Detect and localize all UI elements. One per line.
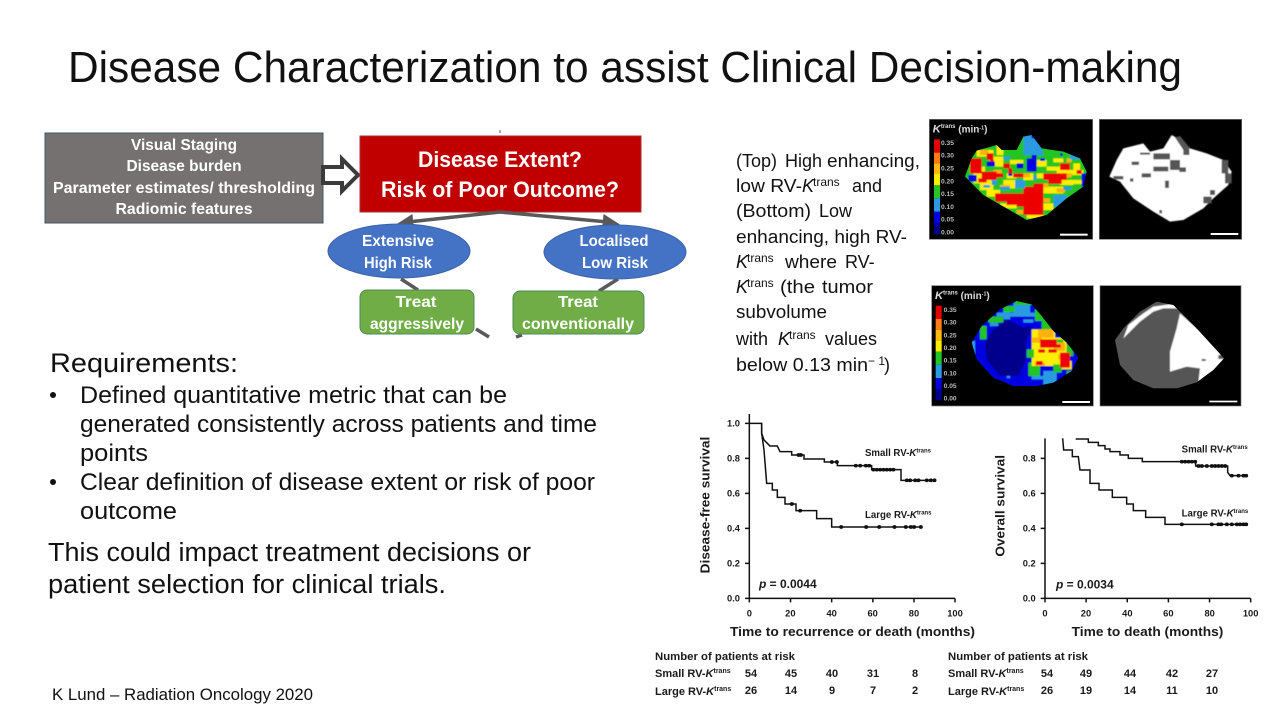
table: patients at risk, overall survival: trans: [1007, 686, 1024, 693]
scale bar: [1209, 401, 1237, 402]
x axis ticks: 0: [1042, 609, 1048, 619]
colour scale: 0.00: [941, 229, 954, 236]
curve: large RV-Ktrans: Large RV-K: [1182, 509, 1234, 520]
table: patients at risk, disease-free survival: 8: [912, 668, 918, 680]
y axis ticks: 0.6: [727, 489, 740, 499]
table: patients at risk, disease-free survival: 40: [826, 668, 838, 680]
mask shape: [1109, 135, 1232, 222]
table: patients at risk, overall survival: 26: [1041, 685, 1053, 697]
heatmap: low enhancing tumour: [932, 286, 1093, 406]
connector stubs below treatment boxes: [476, 329, 522, 337]
table: patients at risk, disease-free survival: 9: [829, 685, 835, 697]
node: extensive high risk: [328, 224, 470, 278]
panel: disease extent question: Risk of Poor Outcome?: [381, 177, 619, 202]
top tick: [499, 130, 501, 133]
curve: large RV-Ktrans: trans: [917, 510, 932, 516]
panel: imaging inputs: Visual Staging: [131, 137, 237, 154]
table: patients at risk, overall survival: [948, 651, 1218, 698]
table: patients at risk, overall survival: 11: [1166, 685, 1178, 697]
table: patients at risk, disease-free survival: trans: [714, 686, 731, 693]
y axis ticks: [727, 419, 741, 604]
caption text: subvolume: [736, 302, 827, 322]
node: treat conventionally: conventionally: [522, 316, 634, 333]
caption text: K: [802, 176, 815, 196]
x axis ticks: 20: [1081, 609, 1091, 619]
caption text: low RV-: [736, 176, 802, 196]
tumour map: [965, 135, 1087, 220]
x axis title: Time to recurrence or death (months): [730, 624, 975, 639]
table: patients at risk, overall survival: 19: [1080, 685, 1092, 697]
table: patients at risk, overall survival: 44: [1124, 668, 1137, 680]
caption text: K: [736, 277, 749, 297]
caption text: (the: [780, 277, 815, 297]
node: localised low risk: Low Risk: [582, 255, 648, 272]
x axis ticks: 100: [947, 609, 963, 619]
caption text: K: [736, 252, 749, 272]
x axis ticks: 40: [1122, 609, 1133, 619]
table: patients at risk, overall survival: 49: [1080, 668, 1092, 680]
y axis ticks: 0.4: [1023, 524, 1036, 534]
axes: [745, 414, 955, 602]
x axis ticks: 40: [826, 609, 837, 619]
caption text: High: [785, 151, 822, 171]
heatmap: low enhancing tumour: trans: [943, 290, 958, 296]
heatmap: low enhancing tumour: -1: [982, 292, 986, 298]
colour scale: 0.15: [941, 191, 954, 198]
colour scale: 0.30: [941, 153, 954, 160]
y axis ticks: 0.6: [1023, 489, 1036, 499]
mask shape: [1115, 302, 1224, 388]
heatmap: high enhancing tumour: (min: [955, 125, 979, 136]
curve: large RV-Ktrans: trans: [1234, 509, 1249, 515]
colour scale: 0.15: [944, 358, 957, 365]
threshold mask: low enhancing tumour: [1100, 286, 1241, 406]
table: patients at risk, disease-free survival: 2: [912, 685, 918, 697]
node: extensive high risk: High Risk: [364, 255, 432, 272]
x axis ticks: 60: [1163, 609, 1174, 619]
colour scale: [936, 306, 957, 403]
caption text: trans: [747, 251, 774, 265]
y axis ticks: 0.2: [1023, 559, 1036, 569]
curve: small RV-Ktrans: [749, 423, 935, 480]
heatmap: high enhancing tumour: -1: [979, 125, 984, 131]
caption text: enhancing,: [827, 151, 920, 171]
colour scale: 0.35: [941, 140, 954, 147]
panel: disease extent question: Disease Extent?: [418, 147, 582, 172]
y axis title: Overall survival: [993, 455, 1007, 557]
table: patients at risk, disease-free survival: 45: [785, 668, 797, 680]
citation: K Lund – Radiation Oncology 2020: [52, 686, 313, 704]
text block: requirements: points: [80, 440, 148, 467]
text block: requirements: Requirements:: [50, 348, 238, 378]
x axis ticks: 80: [1204, 609, 1215, 619]
node: treat aggressively: aggressively: [370, 316, 464, 333]
heatmap: high enhancing tumour: K: [933, 124, 942, 136]
table: patients at risk, disease-free survival: 26: [745, 685, 757, 697]
x axis ticks: 20: [785, 609, 796, 619]
heatmap: low enhancing tumour: (min: [958, 291, 982, 302]
caption text: Low: [819, 201, 853, 221]
node: localised low risk: Localised: [580, 233, 648, 250]
panel: imaging inputs: Radiomic features: [116, 201, 253, 218]
table: patients at risk, overall survival: Small RV-K: [948, 668, 1006, 680]
caption text: RV-: [845, 252, 875, 272]
y axis ticks: 0.8: [1023, 454, 1036, 464]
table: patients at risk, overall survival: 54: [1041, 668, 1054, 680]
colour scale: 0.20: [944, 345, 957, 352]
colour scale: 0.20: [941, 178, 954, 185]
table: patients at risk, overall survival: 42: [1166, 668, 1178, 680]
table: patients at risk, disease-free survival: 31: [867, 668, 879, 680]
tumour map: [972, 301, 1078, 386]
y axis ticks: 1.0: [727, 419, 740, 429]
x axis ticks: 0: [747, 609, 752, 619]
table: patients at risk, overall survival: 27: [1206, 668, 1218, 680]
heatmap: high enhancing tumour: [929, 119, 1093, 239]
table: patients at risk, overall survival: Number of patients at risk: [948, 651, 1089, 663]
chart: overall survival: [993, 438, 1258, 639]
caption text: where: [784, 252, 837, 272]
caption text: − 1: [868, 354, 885, 368]
scale bar: [1060, 234, 1088, 236]
connector: extensive to treat: [401, 279, 418, 290]
connector: localised to treat: [599, 279, 618, 291]
title: Disease Characterization to assist Clinical Decision-making: [68, 43, 1182, 92]
y axis ticks: 0.4: [727, 524, 741, 534]
panel: imaging inputs: Disease burden: [126, 158, 242, 175]
panel: imaging inputs: Parameter estimates/ thresholding: [53, 180, 315, 197]
curve: small RV-Ktrans: [1076, 439, 1248, 476]
curve: large RV-Ktrans: [762, 423, 932, 527]
caption text: trans: [747, 276, 774, 290]
panel: imaging inputs: [45, 133, 323, 223]
text block: impact statement: This could impact treatment decisions or: [48, 539, 532, 567]
node: treat aggressively: [360, 290, 474, 334]
curve: large RV-Ktrans: [1063, 438, 1249, 524]
table: patients at risk, disease-free survival: [655, 651, 918, 698]
axes: [1041, 438, 1251, 602]
panel: disease extent question: [360, 136, 641, 212]
curve: small RV-Ktrans: Small RV-K: [1182, 445, 1233, 456]
p value: p = 0.0034: [1055, 578, 1114, 592]
caption text: trans: [789, 328, 816, 342]
colour scale: 0.25: [944, 332, 957, 339]
caption text: K: [778, 329, 791, 349]
text block: requirements: generated consistently across patients and time: [80, 411, 597, 438]
colour scale: 0.25: [941, 166, 954, 173]
caption text: enhancing, high RV-: [736, 227, 907, 247]
y axis ticks: 0.0: [1023, 594, 1036, 604]
table: patients at risk, disease-free survival: 7: [870, 685, 876, 697]
caption text: tumor: [822, 277, 873, 297]
colour scale: 0.05: [944, 383, 957, 390]
colour scale: [934, 139, 954, 236]
table: patients at risk, disease-free survival: Large RV-K: [655, 686, 714, 698]
x axis ticks: [747, 609, 963, 619]
text block: impact statement: patient selection for clinical trials.: [48, 571, 446, 599]
colour scale: 0.05: [941, 217, 954, 224]
table: patients at risk, overall survival: trans: [1006, 668, 1024, 675]
colour scale: 0.35: [944, 307, 957, 314]
x axis ticks: 60: [867, 609, 878, 619]
y axis ticks: 0.0: [727, 594, 740, 604]
node: localised low risk: [544, 225, 686, 279]
heatmap: high enhancing tumour: ): [984, 125, 987, 136]
text block: requirements: Defined quantitative metric that can be: [80, 382, 507, 409]
colour scale: 0.10: [944, 370, 957, 377]
table: patients at risk, disease-free survival: Small RV-K: [655, 668, 714, 680]
caption text: below 0.13 min: [736, 355, 868, 375]
table: patients at risk, disease-free survival: 54: [745, 668, 758, 680]
chart: disease-free survival: [698, 414, 975, 639]
caption text: (Top): [736, 151, 777, 171]
colour scale: 0.30: [944, 320, 957, 327]
y axis ticks: [1023, 454, 1036, 604]
arrow: question to localised: [500, 212, 616, 227]
caption text: and: [852, 176, 882, 196]
table: patients at risk, overall survival: 14: [1124, 685, 1137, 697]
arrow: question to extensive: [400, 212, 500, 227]
scale bar: [1062, 401, 1090, 403]
caption text: ): [884, 355, 890, 375]
flow diagram: [45, 130, 686, 337]
text block: requirements: Clear definition of disease extent or risk of poor: [80, 469, 595, 496]
caption text: [735, 151, 920, 375]
table: patients at risk, disease-free survival: 14: [785, 685, 798, 697]
x axis ticks: 80: [909, 609, 919, 619]
node: treat conventionally: [513, 291, 644, 334]
table: patients at risk, disease-free survival: Number of patients at risk: [655, 651, 796, 663]
colour scale: 0.10: [941, 204, 954, 211]
text block: requirements: [50, 348, 597, 525]
caption text: values: [825, 329, 877, 349]
table: patients at risk, overall survival: 10: [1206, 685, 1218, 697]
colour scale: 0.00: [944, 396, 957, 403]
node: extensive high risk: Extensive: [362, 233, 434, 250]
threshold mask: high enhancing tumour: [1099, 119, 1242, 239]
y axis ticks: 0.2: [727, 559, 740, 569]
heatmap: low enhancing tumour: K: [935, 290, 944, 302]
curve: small RV-Ktrans: Small RV-K: [865, 448, 916, 459]
y axis ticks: 0.8: [727, 454, 740, 464]
table: patients at risk, overall survival: Large RV-K: [948, 686, 1007, 698]
text block: impact statement: [48, 539, 532, 599]
y axis title: Disease-free survival: [698, 437, 712, 573]
caption text: (Bottom): [736, 201, 811, 221]
heatmap: low enhancing tumour: ): [986, 291, 990, 302]
caption text: trans: [813, 175, 840, 189]
node: treat conventionally: Treat: [558, 294, 598, 311]
scale bar: [1211, 233, 1238, 235]
curve: small RV-Ktrans: trans: [916, 448, 932, 454]
arrow: inputs to question: [323, 159, 358, 191]
node: treat aggressively: Treat: [396, 294, 436, 311]
heatmap: high enhancing tumour: trans: [941, 124, 956, 130]
curve: large RV-Ktrans: Large RV-K: [865, 510, 917, 521]
x axis ticks: 100: [1243, 609, 1258, 619]
curve: small RV-Ktrans: trans: [1233, 445, 1248, 451]
caption text: with: [735, 329, 768, 349]
text block: requirements: outcome: [80, 498, 177, 525]
p value: p = 0.0044: [758, 577, 817, 591]
x axis title: Time to death (months): [1072, 624, 1223, 639]
table: patients at risk, disease-free survival: trans: [714, 668, 731, 675]
x axis ticks: [1042, 609, 1258, 619]
